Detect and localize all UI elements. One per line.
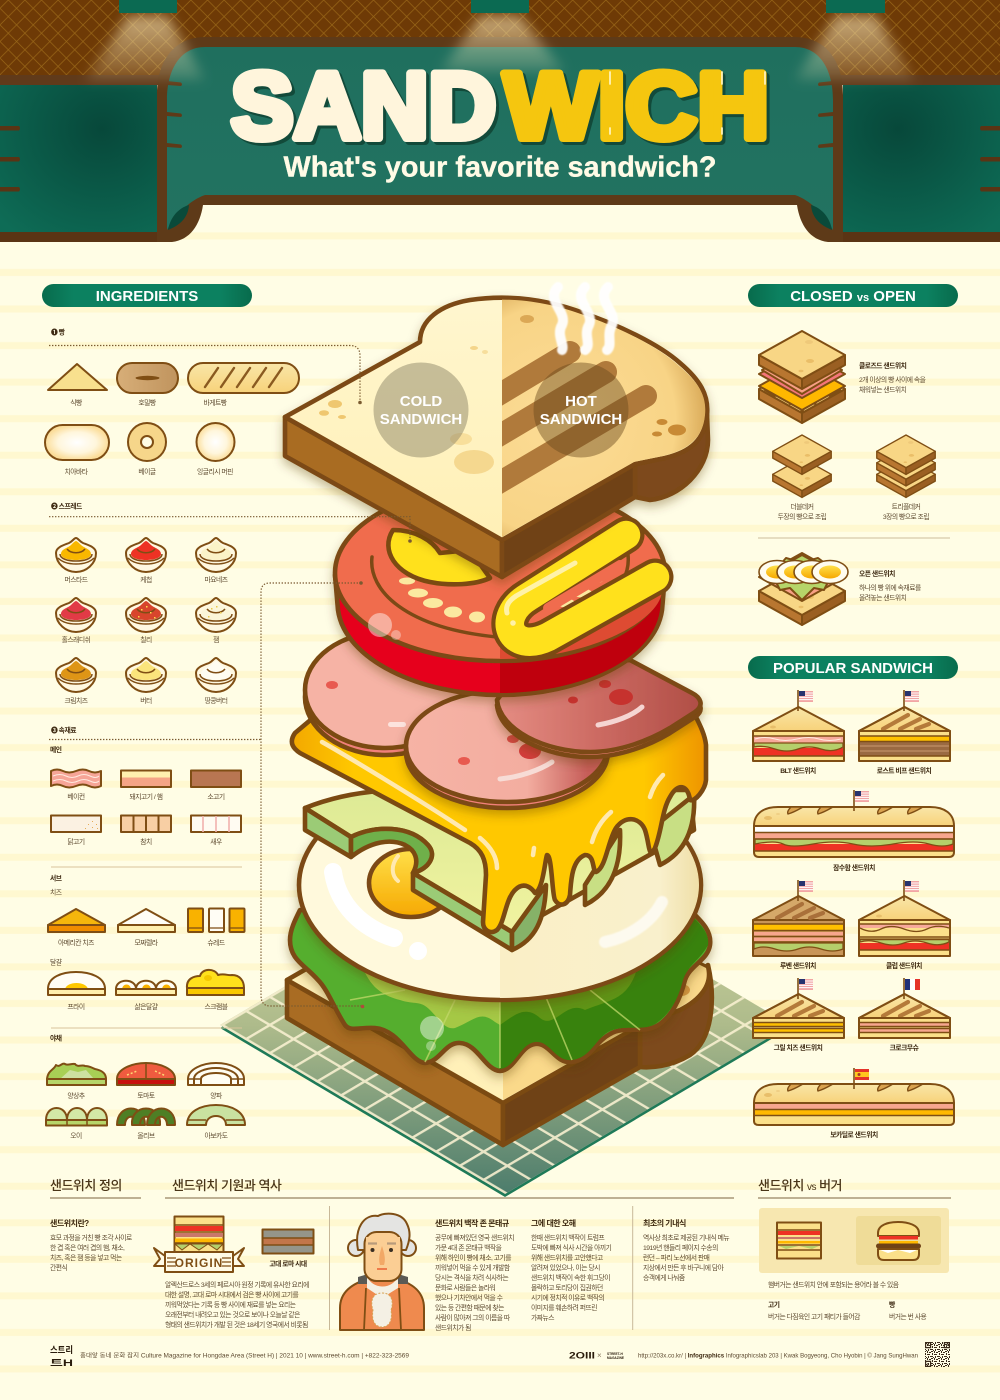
footer — [50, 1342, 950, 1368]
origin text: 알렉산드로스 3세의 페르시아 원정 기록에 유사한 요리에 — [165, 1280, 309, 1289]
icon: bacon — [51, 770, 101, 801]
heading: 샌드위치 정의 — [50, 1178, 122, 1193]
heading: spread: ❷ 스프레드 — [51, 502, 82, 510]
icon: burger — [876, 1222, 921, 1260]
icon: triple decker: 3장의 빵으로 조립 — [883, 512, 929, 521]
icon: peanut butter — [196, 658, 236, 705]
icon: double decker: 더블데커 — [790, 502, 814, 511]
sandwich: bocadillo: 보카딜로 샌드위치 — [830, 1130, 878, 1139]
lettuce — [290, 910, 710, 1071]
text: Earl Sandwich: 가문 4대 존 몬태규 백작을 — [435, 1243, 502, 1252]
icon: fried egg: 프라이 — [67, 1002, 85, 1011]
hot sandwich badge: HOT — [565, 393, 597, 410]
icon: american cheese — [48, 909, 105, 947]
icon: beef: 소고기 — [207, 792, 225, 801]
partner logos: MAGAZINE — [607, 1356, 624, 1360]
icon: ciabatta: 치아바타 — [64, 467, 89, 476]
sub heading: sub: 서브 — [50, 874, 62, 882]
text: closed sandwich: 클로즈드 샌드위치 — [859, 361, 907, 370]
text: closed sandwich — [859, 361, 926, 394]
text: Earl Sandwich: 샌드위치가 됨 — [435, 1323, 471, 1332]
definition text — [50, 1218, 132, 1272]
text: misconception: 위해 샌드위치를 고안했다고 — [531, 1253, 603, 1262]
partner logos: 2OIII — [569, 1350, 595, 1360]
text: Earl Sandwich: 사람이 많아져 그의 이름을 따 — [435, 1313, 511, 1322]
green side panels — [0, 85, 1000, 242]
icon: horseradish — [56, 598, 96, 644]
section: sandwich definition — [50, 1178, 141, 1272]
note: meat: 버거는 다짐육인 고기 패티가 들어감 — [768, 1312, 860, 1321]
icon: chicken: 닭고기 — [67, 837, 85, 846]
icon: lettuce: 양상추 — [67, 1091, 85, 1100]
sandwich: club — [859, 880, 950, 970]
column divider — [632, 1206, 634, 1330]
note: bread: 버거는 번 사용 — [889, 1312, 927, 1321]
heading pill: popular sandwich — [748, 656, 958, 679]
icon: tomato — [117, 1063, 175, 1100]
icon: peanut butter: 땅콩버터 — [204, 696, 228, 705]
icon: shredded cheese: 슈레드 — [207, 938, 225, 947]
icon: butter: 버터 — [140, 696, 152, 705]
spot lamps and light beams — [85, 0, 915, 80]
icon: olive: 올리브 — [137, 1131, 155, 1140]
icon: origin sandwich with ribbon — [154, 1216, 244, 1272]
sub heading: cheese: 치즈 — [50, 888, 62, 896]
text: closed sandwich: 채워넣는 샌드위치 — [859, 385, 907, 394]
sign board — [167, 47, 833, 230]
icon: horseradish: 홀스래디쉬 — [62, 635, 91, 644]
text: open sandwich: 하나의 빵 위에 속재료를 — [859, 583, 921, 592]
header: shop wall and awning sign — [0, 0, 1000, 242]
meat icons — [51, 770, 241, 846]
text: first in-flight meal — [643, 1218, 729, 1282]
comparison panel — [759, 1208, 949, 1273]
subtitle: What's your favorite sandwich? — [284, 152, 716, 184]
text: Earl Sandwich — [435, 1218, 514, 1332]
egg icons — [48, 970, 244, 1011]
title glints — [610, 72, 765, 134]
icon: chili: 칠리 — [140, 635, 152, 644]
sandwich: submarine: 잠수함 샌드위치 — [833, 863, 875, 872]
icon: avocado: 아보카도 — [204, 1131, 228, 1140]
heading: 샌드위치 기원과 역사 — [172, 1178, 282, 1193]
mustard curl: left — [388, 530, 490, 584]
text: Earl Sandwich: 샌드위치 백작 존 몬태규 — [435, 1218, 510, 1228]
text: first in-flight meal: 런던 – 파리 노선에서 판매 — [643, 1253, 710, 1262]
icon: closed sandwich — [759, 331, 845, 423]
text: misconception: 알려져 있었으나, 이는 당시 — [531, 1263, 600, 1272]
text: open sandwich: 올려놓는 샌드위치 — [859, 593, 907, 602]
logo: street H: 스트리 — [50, 1345, 73, 1355]
main exploded sandwich illustration — [285, 287, 712, 1145]
text: first in-flight meal: 지상에서 만든 후 바구니에 담아 — [643, 1263, 725, 1272]
icon: cucumber: 오이 — [70, 1131, 82, 1140]
egg — [290, 836, 710, 1013]
text: misconception — [531, 1218, 612, 1322]
icon: pork or ham — [121, 770, 171, 801]
icon: origin sandwich with ribbon: ORIGIN — [175, 1256, 223, 1270]
icon: mustard — [56, 538, 96, 584]
icon: double decker — [773, 435, 831, 521]
origin text — [165, 1280, 309, 1329]
heading: bread: ❶ 빵 — [51, 328, 66, 336]
sandwich: grilled cheese: 그릴 치즈 샌드위치 — [774, 1043, 823, 1052]
heading: 샌드위치 vs 버거 — [758, 1178, 842, 1193]
text: misconception: 샌드위치 백작이 속한 휘그당이 — [531, 1273, 610, 1282]
note: bread — [889, 1300, 927, 1321]
sandwich: submarine — [754, 790, 954, 872]
tomato slice — [335, 485, 665, 695]
sandwich: club: 클럽 샌드위치 — [886, 961, 922, 970]
sandwich: BLT: BLT 샌드위치 — [780, 766, 816, 775]
title: WICH — [504, 53, 769, 158]
icon: scrambled egg: 스크램블 — [204, 1002, 228, 1011]
section: sandwich origin and history — [154, 1178, 734, 1332]
cheese icons — [48, 908, 244, 947]
icon: jam: 잼 — [213, 635, 219, 644]
definition text: 한 겹 혹은 여러 겹의 햄, 채소, — [50, 1243, 125, 1252]
text: Earl Sandwich: 했으나 기차안에서 먹을 수 — [435, 1293, 503, 1302]
definition text: 샌드위치란? — [50, 1218, 89, 1228]
definition text: 치즈, 혹은 잼 등을 넣고 먹는 — [50, 1253, 122, 1262]
text: Earl Sandwich: 공무에 빠져있던 영국 샌드위치 — [435, 1233, 514, 1242]
partner logos: × — [597, 1351, 602, 1360]
divider line — [51, 1027, 242, 1029]
origin text: 오래전부터 내려오고 있는 것으로 보이나 오늘날 같은 — [165, 1310, 300, 1319]
text: misconception: 몰락하고 토리당이 집권하던 — [531, 1283, 603, 1292]
note: meat — [768, 1300, 860, 1321]
icon: bagel — [128, 423, 166, 476]
cold sandwich badge — [374, 362, 468, 458]
icon: boiled egg — [116, 981, 176, 1011]
icon: sandwich — [777, 1222, 821, 1258]
icon: english muffin: 잉글리시 머핀 — [197, 467, 233, 476]
sub heading: main: 메인 — [50, 745, 62, 754]
icon: cream cheese: 크림치즈 — [64, 696, 88, 705]
origin text: 끼워먹었다는 기록 등 빵 사이에 재료를 넣는 요리는 — [165, 1300, 296, 1309]
top bread, half cold half toasted — [285, 298, 708, 577]
ham slice: left — [305, 632, 465, 755]
note text: 햄버거는 샌드위치 안에 포함되는 용어라 볼 수 있음 — [768, 1280, 899, 1289]
icon: onion: 양파 — [210, 1091, 223, 1100]
text: first in-flight meal: 최초의 기내식 — [643, 1218, 686, 1228]
text: first in-flight meal: 승객에게 나눠줌 — [643, 1273, 685, 1282]
icon: baguette: 바게트빵 — [203, 398, 228, 407]
icon: beef — [191, 770, 241, 801]
icon: triple decker — [877, 435, 935, 521]
icon: tomato: 토마토 — [137, 1091, 155, 1100]
panel: popular sandwich — [748, 656, 958, 1139]
icon: butter — [126, 658, 166, 705]
text: misconception: 그에 대한 오해 — [531, 1218, 576, 1228]
icon: mayonnaise: 마요네즈 — [204, 575, 228, 584]
icon: cucumber — [46, 1108, 107, 1140]
icon: jam — [196, 598, 236, 644]
portrait: Earl of Sandwich — [340, 1214, 424, 1330]
text: first in-flight meal: 역사상 최초로 제공된 기내식 메뉴 — [643, 1233, 729, 1242]
text: Earl Sandwich: 문화로 사람들은 놀라워 — [435, 1283, 496, 1292]
hot sandwich badge — [534, 362, 628, 458]
text: Earl Sandwich: 있는 등 간편함 때문에 찾는 — [435, 1303, 504, 1312]
icon: bacon: 베이컨 — [67, 792, 85, 801]
origin text: 대한 설명, 고대 로마 시대에서 검은 빵 사이에 고기를 — [165, 1290, 299, 1299]
melted cheese — [292, 712, 706, 932]
icon: mayonnaise — [196, 538, 236, 584]
text: misconception: 가짜뉴스 — [531, 1313, 554, 1322]
icon: lettuce — [47, 1064, 106, 1100]
logo: street H: 트H — [50, 1358, 73, 1368]
panel: closed vs open — [748, 284, 958, 625]
cold sandwich badge: SANDWICH — [380, 411, 462, 428]
icon: mozzarella: 모짜렐라 — [134, 938, 159, 947]
hot sandwich badge: SANDWICH — [540, 411, 622, 428]
icon: avocado — [187, 1105, 245, 1140]
connector lines from ingredient lists to sandwich — [49, 346, 412, 1008]
icon: chili — [126, 598, 166, 644]
icon: ancient rome bread — [262, 1230, 314, 1268]
icon: shrimp: 새우 — [210, 837, 222, 846]
sandwich: grilled cheese — [753, 978, 844, 1052]
text: Earl Sandwich: 당시는 격식을 차려 식사하는 — [435, 1273, 508, 1282]
steam — [554, 287, 613, 350]
text: misconception: 도박에 빠져 식사 시간을 아끼기 — [531, 1243, 612, 1252]
sign frame — [157, 37, 843, 242]
logo: street H — [50, 1345, 73, 1368]
sign curl details — [167, 81, 833, 230]
text: open sandwich — [859, 569, 921, 602]
credits: http://203x.co.kr/ | Infographics Infographicslab 203 | Kwak Bogyeong, Cho Hyobin | © Jang SungHwan — [638, 1352, 919, 1360]
divider line — [758, 537, 950, 539]
icon: chicken — [51, 816, 101, 846]
rule — [50, 1197, 141, 1199]
icon: ciabatta — [45, 425, 109, 476]
ham slices — [305, 632, 701, 808]
cold sandwich badge: COLD — [400, 393, 442, 410]
text: misconception: 시기에 정치적 이유로 백작의 — [531, 1293, 604, 1302]
icon: olive — [117, 1108, 175, 1140]
tablecloth — [220, 856, 790, 1197]
title: SAND — [234, 56, 499, 161]
icon: mozzarella — [118, 909, 175, 947]
icon: ketchup: 케첩 — [140, 576, 152, 584]
heading: fillings: ❸ 속재료 — [51, 726, 76, 734]
icon: american cheese: 아메리칸 치즈 — [58, 938, 94, 947]
text: first in-flight meal: 1919년 핸들리 페이지 수송의 — [643, 1243, 718, 1252]
sandwich: BLT — [753, 690, 844, 775]
sandwich: bocadillo — [754, 1068, 954, 1139]
text: open sandwich: 오픈 샌드위치 — [859, 569, 895, 578]
ham slice: right — [497, 660, 701, 757]
divider line — [51, 866, 242, 868]
icon: rye bread — [117, 363, 178, 407]
heading pill: closed vs open — [748, 284, 958, 307]
icon: baguette — [188, 363, 299, 407]
text: Earl Sandwich: 위해 하인이 빵에 채소, 고기를 — [435, 1253, 511, 1262]
mustard hairpin: right — [510, 535, 655, 642]
icon: triple decker: 트리플데커 — [892, 502, 921, 511]
title — [231, 53, 772, 161]
icon: tuna — [121, 816, 171, 846]
mustard squiggles — [388, 530, 655, 642]
panel: ingredients — [42, 284, 299, 1140]
note: meat: 고기 — [768, 1300, 780, 1309]
sandwich: roast beef: 로스트 비프 샌드위치 — [877, 766, 932, 775]
icon: tuna: 참치 — [140, 837, 152, 846]
icon: sliced bread — [48, 364, 107, 407]
section: sandwich vs burger — [758, 1178, 951, 1321]
icon: ketchup — [126, 538, 166, 584]
wall — [0, 0, 1000, 85]
bread icons — [45, 363, 299, 476]
icon: onion — [188, 1063, 244, 1100]
bottom bread — [287, 915, 712, 1145]
definition text: 효모 과정을 거친 빵 조각 사이로 — [50, 1233, 132, 1242]
rule — [758, 1197, 951, 1199]
qr code — [925, 1342, 950, 1367]
icon: double decker: 두장의 빵으로 조립 — [778, 512, 827, 521]
sandwich: reuben: 루벤 샌드위치 — [780, 961, 816, 970]
text: misconception: 이미지를 훼손하려 퍼뜨린 — [531, 1303, 597, 1312]
sandwich: croque monsieur: 크로크무슈 — [890, 1044, 919, 1052]
icon: ancient rome bread: 고대 로마 시대 — [269, 1259, 307, 1268]
icon: english muffin — [196, 423, 234, 476]
column divider — [328, 1206, 330, 1330]
icon: sliced bread: 식빵 — [70, 398, 83, 407]
heading pill: popular sandwich: POPULAR SANDWICH — [773, 660, 933, 677]
icon: scrambled egg — [187, 970, 244, 1011]
text: Earl Sandwich: 끼워넣어 먹을 수 있게 개발함 — [435, 1263, 510, 1272]
icon: bagel: 베이글 — [138, 467, 156, 476]
partner logos — [569, 1350, 624, 1360]
icon: shredded cheese — [188, 908, 244, 947]
avocado — [305, 790, 694, 950]
icon: shrimp — [191, 816, 241, 846]
definition text: 간편식 — [50, 1263, 68, 1272]
text: misconception: 한때 샌드위치 백작이 트럼프 — [531, 1233, 604, 1242]
icon: cream cheese — [56, 658, 96, 705]
title: SAND — [231, 53, 496, 158]
icon: pork or ham: 돼지고기 / 햄 — [130, 792, 163, 801]
spread icons — [56, 538, 236, 705]
sandwich: croque monsieur — [859, 978, 950, 1052]
origin text: 형태의 샌드위치가 개발 된 것은 18세기 영국에서 비롯됨 — [165, 1320, 308, 1329]
text: closed sandwich: 2개 이상의 빵 사이에 속을 — [859, 375, 926, 384]
icon: boiled egg: 삶은달걀 — [134, 1002, 158, 1011]
icon: rye bread: 호밀빵 — [138, 398, 157, 407]
partner logos: STREET-H — [607, 1352, 623, 1356]
icon: fried egg — [48, 972, 105, 1011]
vegetable icons — [46, 1063, 245, 1140]
icon: mustard: 머스타드 — [64, 575, 88, 584]
note: bread: 빵 — [889, 1300, 896, 1309]
title: WICH — [507, 56, 772, 161]
sub heading: egg: 달걀 — [50, 958, 62, 966]
heading pill: closed vs open: CLOSED vs OPEN — [790, 288, 916, 305]
sandwich: reuben — [753, 880, 844, 970]
ham slice: middle — [406, 690, 608, 808]
publisher info: 홍대앞 동네 문화 잡지 Culture Magazine for Hongdae Area (Street H) | 2021 10 | www.street-h.com | +822-323-2569 — [80, 1352, 410, 1360]
rule — [165, 1197, 734, 1199]
heading pill: ingredients: INGREDIENTS — [96, 288, 198, 305]
sub heading: vegetables: 야채 — [50, 1034, 62, 1042]
icon: open sandwich — [759, 553, 848, 625]
heading pill: ingredients — [42, 284, 252, 307]
sandwich: roast beef — [859, 690, 950, 775]
